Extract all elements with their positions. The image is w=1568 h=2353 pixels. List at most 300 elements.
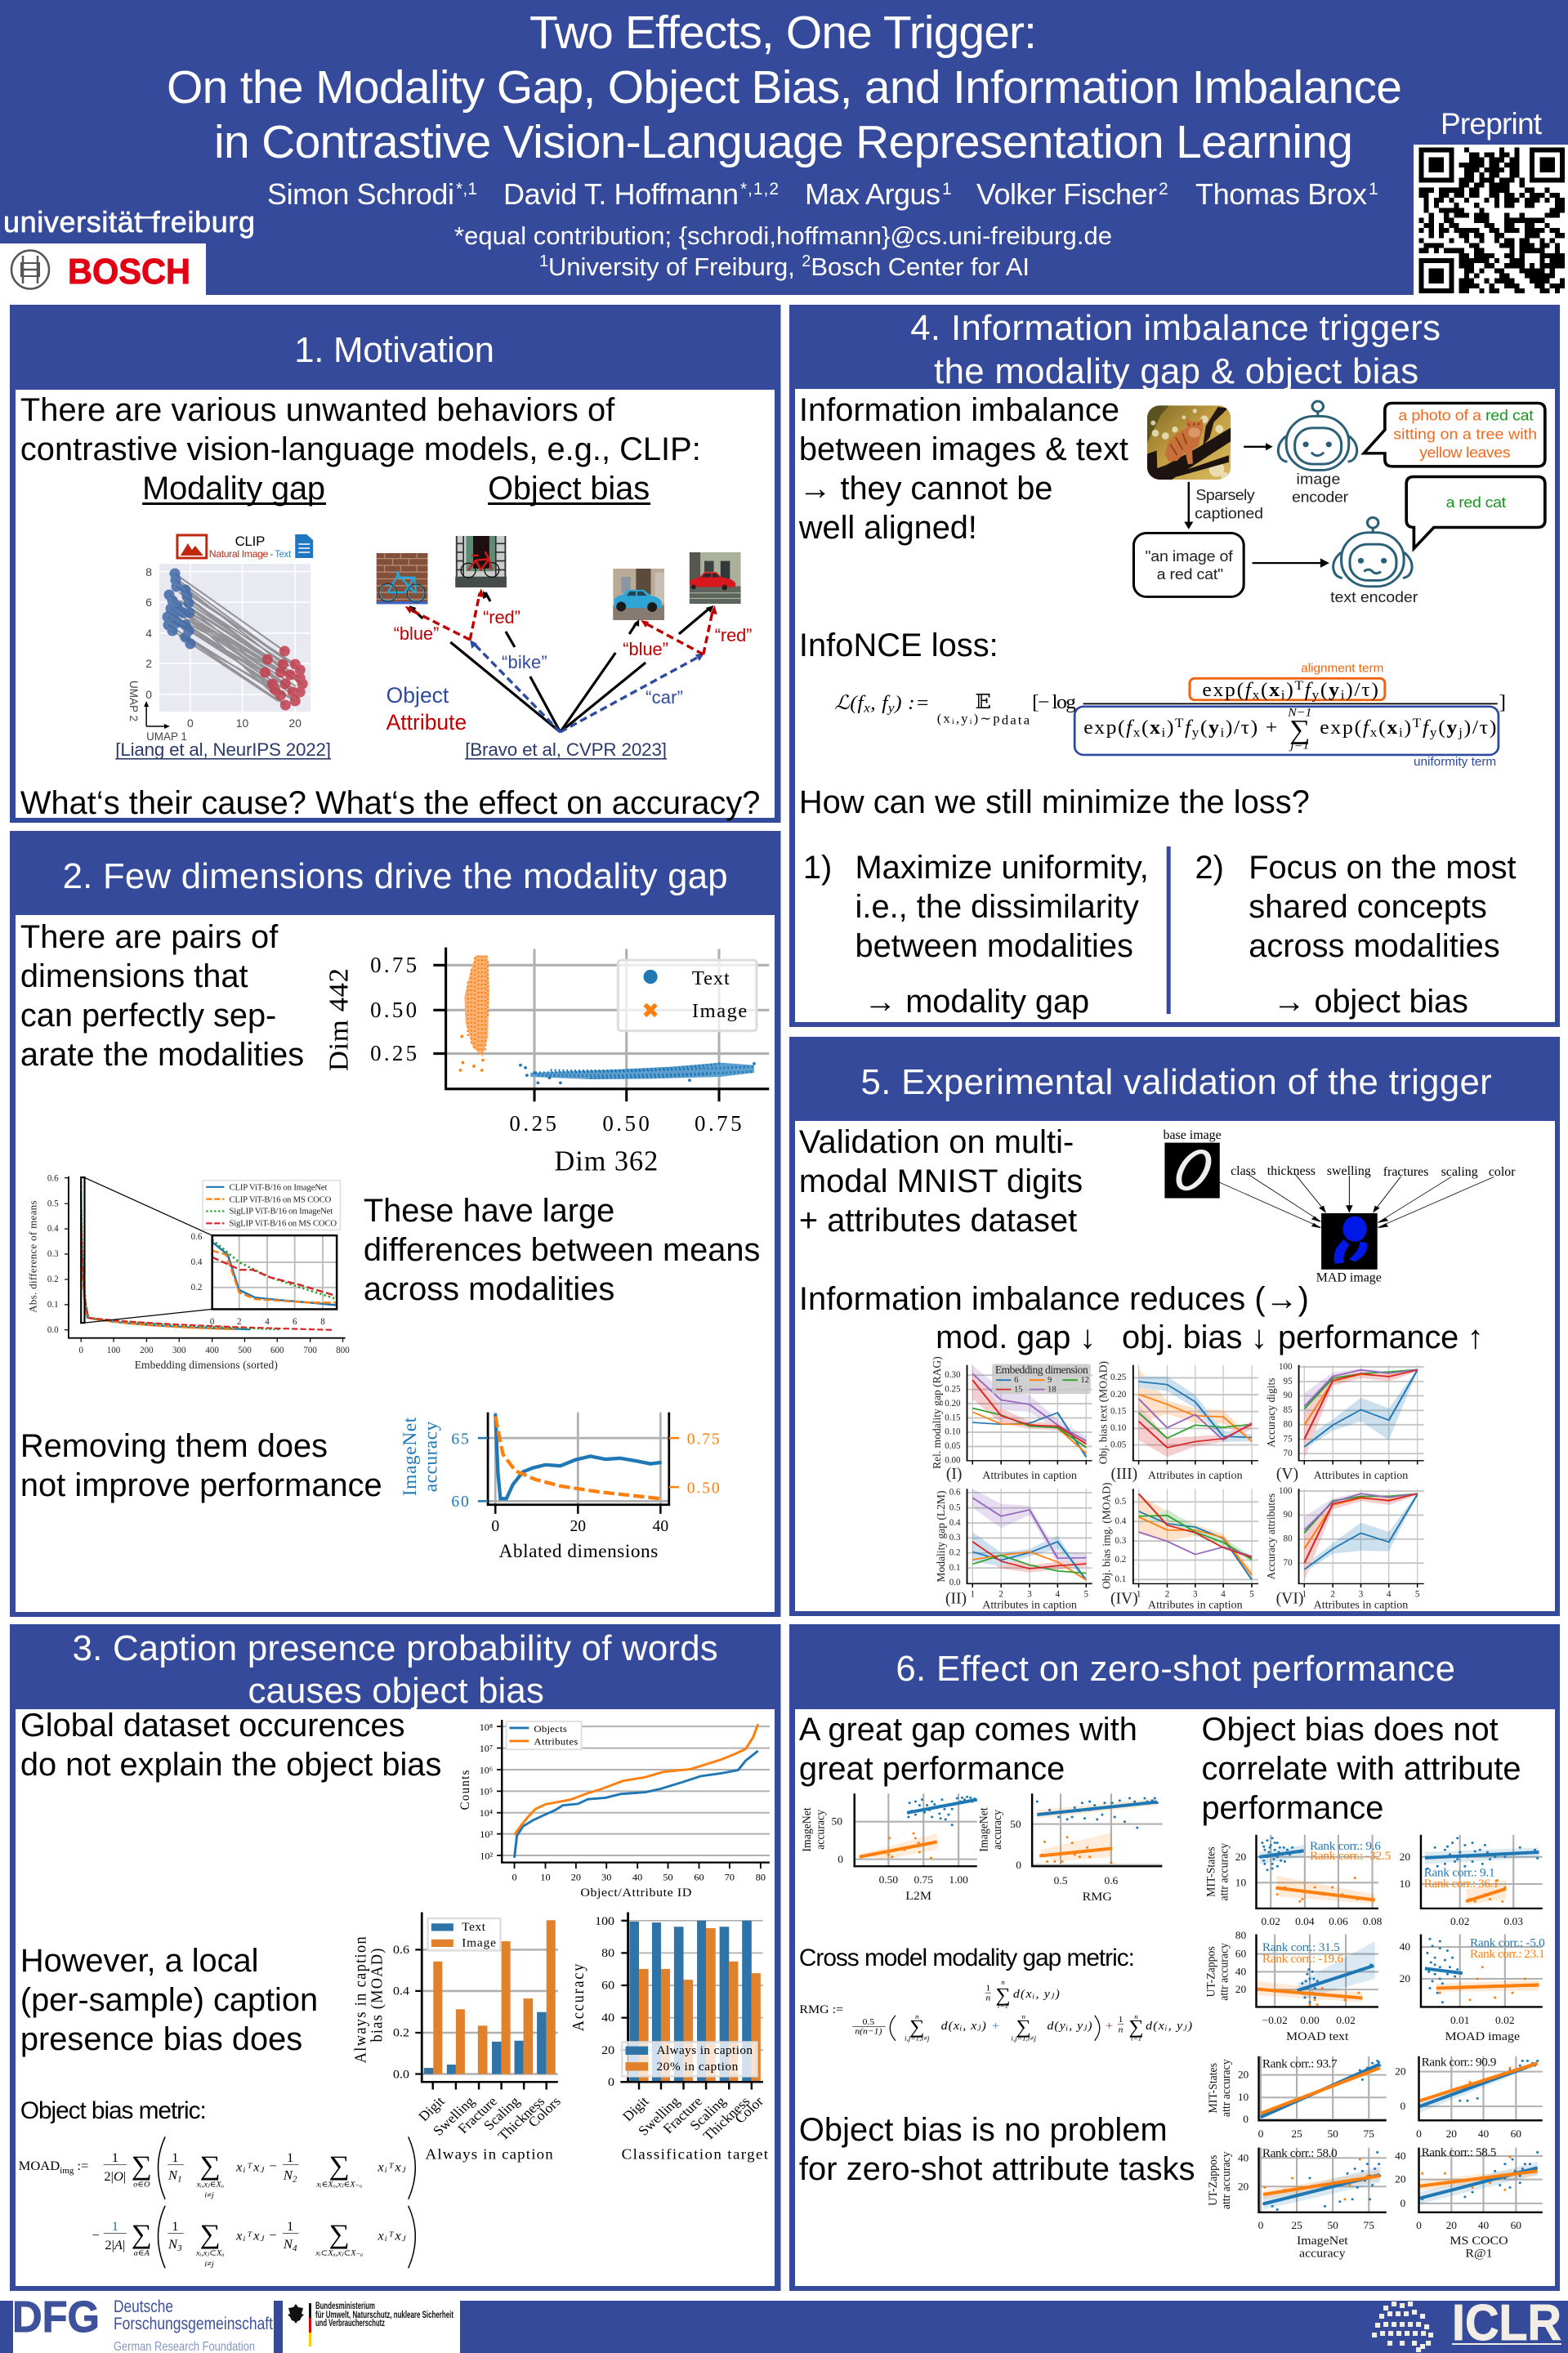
text: validation dataset [799, 1124, 1083, 1239]
formula: RMG: i,j=1,i≠j [1011, 2034, 1037, 2043]
caption box: short caption [1133, 533, 1244, 596]
logo: Bundesministerium: Bundesministerium [315, 2300, 375, 2311]
charts: ImageNet accuracy vs L2M and RMG: ImageNet [977, 1807, 991, 1852]
chart: ablated dimensions [400, 1413, 720, 1562]
chart: counts of objects and attributes: 10⁷ [480, 1744, 493, 1754]
charts: six attribute line plots: Modality gap (L2M) [935, 1491, 947, 1583]
formula: MOAD: xᵢᵀxⱼ [377, 2230, 406, 2244]
axis labels: 0.20 [1110, 1390, 1127, 1400]
charts: attribute accuracy vs ImageNet and MS COCO: 40 [1238, 2152, 1249, 2163]
formula: InfoNCE: ) [1167, 717, 1173, 739]
charts: object bias vs attribute accuracy: 0.08 [1363, 1915, 1383, 1927]
diagram: object bias embedding arrows: Object [386, 683, 449, 708]
chart: absolute difference of means: 4 [265, 1317, 270, 1327]
chart: CLIP UMAP modality gap: 4 [145, 627, 152, 640]
authors [267, 177, 1378, 211]
chart: counts of objects and attributes: Object/Attribute ID [580, 1886, 691, 1900]
charts: attribute accuracy vs ImageNet and MS COCO: 25 [1291, 2128, 1302, 2140]
chart: Dim 362 vs Dim 442 scatter: 0.25 [509, 1111, 556, 1136]
formula: MOAD: 1 [112, 2221, 118, 2234]
formula: InfoNCE: ( [1261, 680, 1268, 701]
charts: attribute accuracy vs ImageNet and MS COCO: 0 [1416, 2128, 1422, 2140]
formula: InfoNCE: T [1175, 716, 1184, 730]
chart: absolute difference of means: 400 [205, 1346, 219, 1355]
axis labels: 0.1 [1115, 1574, 1126, 1584]
chart: counts of objects and attributes: Counts [458, 1770, 472, 1810]
chart: absolute difference of means: CLIP ViT-B/16 on ImageNet [229, 1182, 328, 1192]
formula: InfoNCE: x [1253, 687, 1260, 702]
chart: CLIP UMAP modality gap: 0 [187, 717, 194, 730]
bar chart: classification accuracy: Color [732, 2093, 766, 2126]
formula: RMG: + [992, 2019, 999, 2033]
legend: embedding dimension [992, 1364, 1091, 1394]
bar chart: always in caption bias: Text [462, 1921, 486, 1934]
chart: counts of objects and attributes: 10² [480, 1851, 494, 1862]
text: option 2: shared concepts [1249, 889, 1487, 925]
chart: CLIP UMAP modality gap: - [270, 548, 273, 560]
text: global occurrences [20, 1708, 441, 1783]
text: object bias no correlation: correlate with attribute [1201, 1751, 1521, 1787]
formula: InfoNCE: y [1192, 725, 1199, 739]
text: large differences: across modalities [364, 1271, 614, 1307]
axis labels: 0.05 [1110, 1440, 1127, 1449]
formula: MOAD: 1 [172, 2221, 178, 2234]
bar chart: classification accuracy: Digit [619, 2094, 652, 2124]
formula: InfoNCE: ℒ(f [834, 693, 864, 714]
chart: counts of objects and attributes: 10⁴ [480, 1807, 493, 1819]
chart: counts of objects and attributes: 30 [601, 1872, 611, 1882]
axis labels: 0.15 [945, 1413, 961, 1422]
formula: MOAD [19, 2136, 415, 2269]
diagram: MAD image generation: scaling [1441, 1165, 1478, 1179]
charts: attribute accuracy vs ImageNet and MS COCO: 75 [1364, 2128, 1374, 2140]
axis labels: 0.2 [949, 1547, 961, 1558]
chart: Dim 362 vs Dim 442 scatter: Image [692, 1000, 747, 1022]
text: global occurrences: do not explain the object bias [20, 1747, 441, 1783]
heading: 6. Effect on zero-shot performance [896, 1649, 1455, 1689]
chart: counts of objects and attributes: 10³ [480, 1829, 494, 1840]
bar chart: classification accuracy: 20% in caption [656, 2061, 739, 2074]
bar chart: always in caption bias: Scaling [480, 2093, 523, 2133]
label: sparsely captioned: Sparsely [1195, 488, 1255, 504]
chart: ablated dimensions: 65 [451, 1430, 469, 1449]
label: sparsely captioned: captioned [1195, 506, 1263, 522]
charts: object bias vs attribute accuracy: 20 [1235, 1851, 1247, 1863]
charts: attribute accuracy vs ImageNet and MS COCO: 0 [1400, 2101, 1406, 2112]
callout: rich caption: a photo of a red cat [1398, 408, 1534, 424]
charts: object bias vs attribute accuracy: Rank corr.: 23.1 [1470, 1949, 1545, 1961]
panel: 2. Few dimensions [10, 831, 781, 1617]
formula: MOAD: ∑ [329, 2220, 350, 2249]
bar chart: always in caption bias: bias (MOAD) [369, 1949, 386, 2042]
axis labels: 85 [1284, 1405, 1293, 1415]
charts: attribute accuracy vs ImageNet and MS COCO: 60 [1511, 2219, 1522, 2231]
charts: object bias vs attribute accuracy: 0.00 [1300, 2014, 1320, 2026]
bar chart: always in caption bias: Always in caption [426, 2146, 553, 2162]
charts: six attribute line plots: Attributes in caption [982, 1469, 1077, 1482]
chart: CLIP UMAP modality gap: Natural Image [209, 548, 269, 560]
axis labels: 100 [1279, 1486, 1293, 1496]
chart: absolute difference of means: 2 [237, 1317, 241, 1327]
charts: attribute accuracy vs ImageNet and MS COCO: 0 [1243, 2114, 1249, 2125]
diagram: image and text encoders: image [1296, 471, 1340, 489]
callout: rich caption: yellow leaves [1419, 445, 1511, 462]
formula: InfoNCE: T [1295, 678, 1303, 693]
charts: six attribute line plots: Obj. bias img. (MOAD) [1101, 1482, 1113, 1589]
formula: InfoNCE: f [1423, 717, 1431, 739]
charts: attribute accuracy vs ImageNet and MS COCO: MIT-States [1207, 2063, 1220, 2113]
formula: RMG: n [1119, 2025, 1124, 2034]
charts: six attribute line plots: Accuracy attributes [1265, 1494, 1277, 1579]
logo: Bundesministerium: für Umwelt, Naturschutz, nukleare Sicherheit [315, 2309, 453, 2320]
axis labels: 95 [1284, 1377, 1293, 1386]
formula: InfoNCE: N−1 [1287, 706, 1311, 719]
chart: absolute difference of means: 8 [320, 1317, 325, 1327]
bar chart: always in caption bias: 0.6 [393, 1943, 409, 1957]
charts: ImageNet accuracy vs L2M and RMG: accuracy [814, 1809, 828, 1850]
formula: MOAD: − [269, 2229, 277, 2242]
chart: absolute difference of means: 0.4 [47, 1224, 59, 1234]
text: option 1: 1) [803, 850, 832, 886]
charts: six attribute line plots: 4 [1221, 1589, 1226, 1599]
chart: absolute difference of means: Embedding dimensions (sorted) [135, 1359, 278, 1372]
charts: six attribute line plots: 3 [1193, 1589, 1198, 1599]
formula: InfoNCE: i [1341, 687, 1345, 702]
text: option 1: → modality gap [864, 984, 1089, 1020]
charts: attribute accuracy vs ImageNet and MS COCO: 0 [1400, 2197, 1406, 2209]
formula: RMG: d(xᵢ, yⱼ) [1146, 2019, 1192, 2033]
logo: ICLR [1374, 2295, 1561, 2351]
axis labels: 0.25 [1110, 1373, 1127, 1382]
charts: attribute accuracy vs ImageNet and MS COCO: 50 [1327, 2219, 1338, 2231]
diagram: MAD image generation: fractures [1383, 1165, 1428, 1179]
chart: ablated dimensions: 0.75 [687, 1430, 720, 1449]
diagram: object bias embedding arrows: “red” [483, 607, 520, 627]
formula: InfoNCE: i [1281, 687, 1285, 702]
formula: MOAD: 1 [177, 2175, 182, 2184]
logo: DFG: DFG [12, 2293, 100, 2342]
charts: six attribute line plots: 1 [970, 1589, 975, 1599]
charts: attribute accuracy vs ImageNet and MS COCO: 20 [1395, 2065, 1406, 2078]
formula: RMG: RMG := [799, 2003, 843, 2016]
chart: Dim 362 vs Dim 442 scatter: Text [692, 967, 730, 989]
chart: absolute difference of means: 0 [210, 1317, 215, 1327]
callout: short caption output: a red cat [1446, 494, 1507, 511]
heading: 4. Information imbalance triggers [910, 308, 1441, 348]
text: how to minimise: How can we still minimize the loss? [799, 784, 1310, 820]
formula: InfoNCE: i [1162, 725, 1166, 739]
formula: InfoNCE: i [1220, 725, 1225, 739]
diagram: image and text encoders: text encoder [1330, 589, 1418, 606]
axis labels: 0.30 [945, 1370, 961, 1380]
formula: RMG: 0.5 [863, 2018, 875, 2027]
chart: counts of objects and attributes: Objects [534, 1723, 567, 1735]
charts: six attribute line plots: 5 [1084, 1589, 1088, 1599]
authors: Simon Schrodi [267, 177, 454, 211]
charts: six attribute line plots: 5 [1249, 1589, 1254, 1599]
text: imbalance reduces: Information imbalance reduces (→) [799, 1281, 1309, 1317]
formula: RMG: n [1134, 2012, 1138, 2020]
charts: attribute accuracy vs ImageNet and MS COCO: Rank corr.: 58.5 [1422, 2146, 1496, 2159]
charts: object bias vs attribute accuracy: 40 [1400, 1940, 1411, 1953]
charts: object bias vs attribute accuracy: Rank corr.: -32.5 [1310, 1851, 1391, 1863]
charts: six attribute line plots: 3 [1359, 1589, 1364, 1599]
charts: object bias vs attribute accuracy: 0.02 [1336, 2014, 1356, 2026]
logo: ICLR: ICLR [1452, 2295, 1561, 2351]
authors: Volker Fischer [976, 177, 1157, 211]
charts: six attribute line plots: Attributes in caption [982, 1599, 1077, 1612]
charts: six attribute line plots: Attributes in caption [1314, 1469, 1408, 1482]
label: sparsely captioned [1195, 488, 1263, 522]
bar chart: classification accuracy: 40 [601, 2011, 614, 2025]
charts: ImageNet accuracy vs L2M and RMG: L2M [905, 1889, 931, 1903]
chart: counts of objects and attributes: Attributes [534, 1736, 578, 1747]
formula: MOAD: ∑ [132, 2220, 152, 2249]
diagram: object bias embedding arrows: “blue” [623, 639, 668, 659]
axis labels: 0.5 [1115, 1497, 1127, 1507]
formula: MOAD: MOAD [19, 2160, 60, 2173]
bar chart: classification accuracy: Thickness [700, 2093, 753, 2143]
formula: MOAD: xᵢ,xⱼ⊂Xₐ [195, 2249, 224, 2258]
charts: object bias vs attribute accuracy: attr accuracy [1217, 1842, 1231, 1900]
text: pairs of dimensions: dimensions that [20, 958, 248, 994]
formula: InfoNCE: x [863, 700, 870, 716]
icon: image [177, 535, 207, 558]
chart: absolute difference of means: 100 [107, 1346, 121, 1355]
text: no problem [799, 2112, 1195, 2187]
chart: absolute difference of means: 200 [140, 1346, 154, 1355]
axis labels: 0.6 [949, 1488, 961, 1498]
caption box: short caption: a red cat" [1157, 567, 1223, 583]
charts: attribute accuracy vs ImageNet and MS COCO: 10 [1238, 2092, 1249, 2103]
formula: RMG: + [1106, 2019, 1113, 2033]
chart: counts of objects and attributes: 50 [663, 1872, 673, 1882]
text: pairs of dimensions: can perfectly sep- [20, 998, 276, 1034]
formula: InfoNCE: exp(f [1320, 717, 1369, 739]
chart: Dim 362 vs Dim 442 scatter: Dim 362 [555, 1145, 658, 1176]
diagram: MAD image generation: class [1231, 1164, 1256, 1178]
charts: object bias vs attribute accuracy: 0.06 [1329, 1915, 1348, 1927]
chart: absolute difference of means: 0.2 [47, 1275, 59, 1284]
charts: attribute accuracy vs ImageNet and MS COCO: ImageNet [1297, 2234, 1348, 2248]
charts: ImageNet accuracy vs L2M and RMG: 0 [1016, 1859, 1021, 1871]
chart: absolute difference of means: Abs. difference of means [27, 1200, 39, 1313]
charts: object bias vs attribute accuracy: UT-Zappos [1204, 1946, 1218, 1997]
chart: ablated dimensions: 0.50 [687, 1479, 720, 1498]
panel: 5. Experimental validation [789, 1037, 1560, 1616]
formula: InfoNCE: (xᵢ,yᵢ)∼p [937, 712, 1000, 726]
affiliations: 2 [802, 252, 811, 270]
charts: attribute accuracy vs ImageNet and MS COCO: 40 [1478, 2128, 1490, 2140]
text: option 2 [1195, 850, 1517, 1020]
axis labels: 0.25 [945, 1384, 961, 1394]
axis labels [945, 1362, 1293, 1587]
chart: CLIP UMAP modality gap: 0 [145, 688, 152, 701]
text: option 2: 2) [1195, 850, 1224, 886]
title [167, 7, 1402, 168]
formula: InfoNCE: )/τ) [1464, 717, 1496, 739]
formula: MOAD: o∈O [133, 2181, 150, 2189]
formula: MOAD: 1 [287, 2221, 293, 2234]
legend: embedding dimension: 12 [1081, 1376, 1089, 1385]
chart: counts of objects and attributes: 10⁶ [480, 1765, 493, 1775]
charts: attribute accuracy vs ImageNet and MS COCO: Rank corr.: 58.0 [1262, 2147, 1338, 2160]
charts: object bias vs attribute accuracy: 60 [1235, 1948, 1247, 1959]
formula: MOAD: 2 [293, 2175, 297, 2184]
text: removing dimensions [20, 1428, 382, 1503]
formula: RMG: n(n−1) [855, 2027, 882, 2037]
text: great gap [799, 1712, 1137, 1787]
charts: attribute accuracy vs ImageNet and MS COCO: 40 [1478, 2219, 1490, 2231]
formula: InfoNCE: ∑ [1289, 715, 1310, 745]
chart: absolute difference of means: 6 [293, 1317, 297, 1327]
charts: ImageNet accuracy vs L2M and RMG: 0.5 [1054, 1874, 1068, 1886]
axis labels: 100 [1279, 1362, 1293, 1372]
charts: object bias vs attribute accuracy: Rank corr.: 36.1 [1424, 1877, 1499, 1891]
formula: InfoNCE: y [887, 700, 895, 716]
axis labels: 0.05 [945, 1441, 961, 1451]
charts: ImageNet accuracy vs L2M and RMG: accuracy [991, 1809, 1004, 1850]
axis labels: 0.2 [1115, 1555, 1126, 1565]
charts: attribute accuracy vs ImageNet and MS COCO: 20 [1238, 2069, 1249, 2081]
formula: InfoNCE: y [1430, 725, 1437, 739]
axis labels: 0.0 [949, 1578, 961, 1587]
diagram: object bias embedding arrows: Attribute [386, 710, 467, 734]
axis labels: 0.4 [1115, 1516, 1127, 1526]
formula: InfoNCE: ) [1404, 717, 1411, 739]
axis labels: 0.20 [945, 1399, 961, 1409]
panel: 4. Information imbalance [789, 305, 1560, 1027]
text: cross model metric: Cross model modality gap metric: [799, 1944, 1135, 1971]
text: imbalance statement [798, 392, 1128, 546]
formula: MOAD: ∑ [200, 2150, 221, 2181]
formula: InfoNCE: ) [1286, 680, 1293, 701]
text: object bias metric: Object bias metric: [20, 2097, 207, 2124]
chart: Dim 362 vs Dim 442 scatter: 0.50 [370, 998, 417, 1022]
header band [0, 0, 1568, 295]
legend: embedding dimension: 18 [1048, 1385, 1057, 1394]
text: imbalance statement: between images & text [799, 431, 1128, 467]
diagram: image and text encoders [1133, 401, 1545, 606]
bar chart: classification accuracy: 60 [601, 1979, 614, 1992]
axis labels: 0.3 [949, 1533, 961, 1543]
charts: object bias vs attribute accuracy: 10 [1235, 1877, 1247, 1888]
formula: RMG: i=1 [998, 2002, 1008, 2010]
charts: six attribute line plots: Attributes in caption [1148, 1469, 1243, 1482]
charts: object bias vs attribute accuracy: attr accuracy [1217, 1942, 1231, 2001]
text: pairs of dimensions: arate the modalities [20, 1037, 304, 1073]
chart: ablated dimensions: 60 [451, 1493, 469, 1511]
formula: MOAD: N [168, 2169, 177, 2183]
charts: six attribute line plots: (II) [945, 1589, 967, 1607]
charts: object bias vs attribute accuracy: 20 [1400, 1851, 1411, 1863]
chart: Dim 362 vs Dim 442 scatter: 0.75 [695, 1111, 742, 1136]
formula: InfoNCE: f [1185, 717, 1193, 739]
chart: CLIP UMAP modality gap: 8 [145, 565, 152, 578]
chart: absolute difference of means: CLIP ViT-B/16 on MS COCO [229, 1194, 332, 1204]
bar chart: always in caption bias: 0.4 [393, 1985, 409, 1998]
axis labels: 70 [1284, 1449, 1293, 1458]
text: InfoNCE loss: InfoNCE loss: [799, 627, 998, 663]
formula: RMG [799, 1978, 1192, 2043]
charts: object bias vs attribute accuracy: −0.02 [1262, 2014, 1288, 2026]
charts: six attribute line plots: (V) [1276, 1465, 1298, 1483]
charts: six attribute line plots: 2 [1165, 1589, 1169, 1599]
charts: six attribute line plots: Attributes in caption [1314, 1599, 1408, 1612]
formula: MOAD: 1 [112, 2151, 118, 2165]
charts: object bias vs attribute accuracy [1204, 1835, 1545, 2043]
bar chart: classification accuracy: Always in caption [656, 2044, 753, 2057]
bar chart: classification accuracy: Scaling [687, 2093, 729, 2133]
subheading: modality gap: Modality gap [142, 471, 325, 507]
chart: absolute difference of means: 0 [78, 1346, 83, 1355]
intro text: There are various unwanted behaviors of [20, 392, 615, 428]
bar chart: always in caption bias: Swelling [430, 2093, 478, 2139]
axis labels: 0.1 [949, 1563, 961, 1573]
heading: 2. Few dimensions drive the modality gap [63, 856, 728, 896]
panel: 6. Zero-shot performance [789, 1624, 1560, 2291]
heading: 3. Caption presence probability of words [73, 1628, 718, 1668]
formula: MOAD: xᵢᵀxⱼ [235, 2161, 265, 2174]
formula: InfoNCE: uniformity term [1414, 757, 1496, 769]
text: local caption presence: presence bias does [20, 2021, 302, 2057]
chart: counts of objects and attributes: 10⁵ [480, 1786, 493, 1797]
formula: MOAD: − [92, 2229, 100, 2242]
charts: ImageNet accuracy vs L2M and RMG: 1.00 [949, 1873, 968, 1886]
chart: CLIP UMAP modality gap: CLIP [235, 534, 265, 549]
formula: MOAD: ∑ [132, 2150, 152, 2181]
intro text [20, 392, 701, 467]
charts: six attribute line plots: (I) [946, 1465, 962, 1483]
axis labels: 0.4 [949, 1518, 961, 1528]
formula: InfoNCE: , f [870, 693, 891, 714]
chart: counts of objects and attributes: 60 [694, 1872, 704, 1882]
chart: CLIP UMAP modality gap [127, 534, 313, 743]
formula: RMG: i,j=1,i≠j [905, 2034, 930, 2043]
bar chart: always in caption bias: 0.0 [393, 2068, 409, 2082]
affiliations: 1 [539, 252, 548, 270]
heading [910, 308, 1441, 391]
logo: Bundesministerium: und Verbraucherschutz [315, 2317, 385, 2328]
charts: attribute accuracy vs ImageNet and MS COCO: 20 [1238, 2181, 1249, 2192]
charts: attribute accuracy vs ImageNet and MS COCO: attr accuracy [1220, 2059, 1233, 2117]
formula: InfoNCE: j [1458, 725, 1463, 739]
axis labels: 0.15 [1110, 1406, 1127, 1416]
charts: object bias vs attribute accuracy: 0.02 [1450, 1915, 1470, 1927]
formula: RMG: ∑ [1128, 2016, 1144, 2038]
chart: ablated dimensions: 0 [491, 1517, 499, 1535]
formula: RMG: d(xᵢ, yⱼ) [1013, 1987, 1060, 2001]
formula: InfoNCE: exp(f [1202, 680, 1251, 701]
chart: counts of objects and attributes [458, 1720, 770, 1900]
charts: attribute accuracy vs ImageNet and MS COCO: accuracy [1299, 2247, 1346, 2260]
axis labels: 0.5 [949, 1502, 961, 1512]
formula: MOAD: 1 [287, 2151, 293, 2165]
text: option 1 [803, 850, 1149, 1020]
formula: InfoNCE: data [1002, 714, 1030, 727]
charts: six attribute line plots: 1 [1302, 1589, 1307, 1599]
formula: InfoNCE: ( [1141, 717, 1149, 739]
affiliations: *equal contribution; {schrodi,hoffmann}@cs.uni-freiburg.de [454, 221, 1112, 250]
image: base digit [1164, 1143, 1220, 1199]
formula: RMG: d(yᵢ, yⱼ) [1048, 2019, 1092, 2033]
text: great gap: great performance [799, 1751, 1065, 1787]
charts: ImageNet accuracy vs L2M and RMG: ImageNet [800, 1807, 814, 1852]
formula: InfoNCE: )/τ) [1346, 680, 1378, 701]
text: object bias no correlation: Object bias does not [1201, 1712, 1499, 1748]
formula: InfoNCE: i [1399, 725, 1403, 739]
formula: RMG: n [1021, 2012, 1026, 2020]
